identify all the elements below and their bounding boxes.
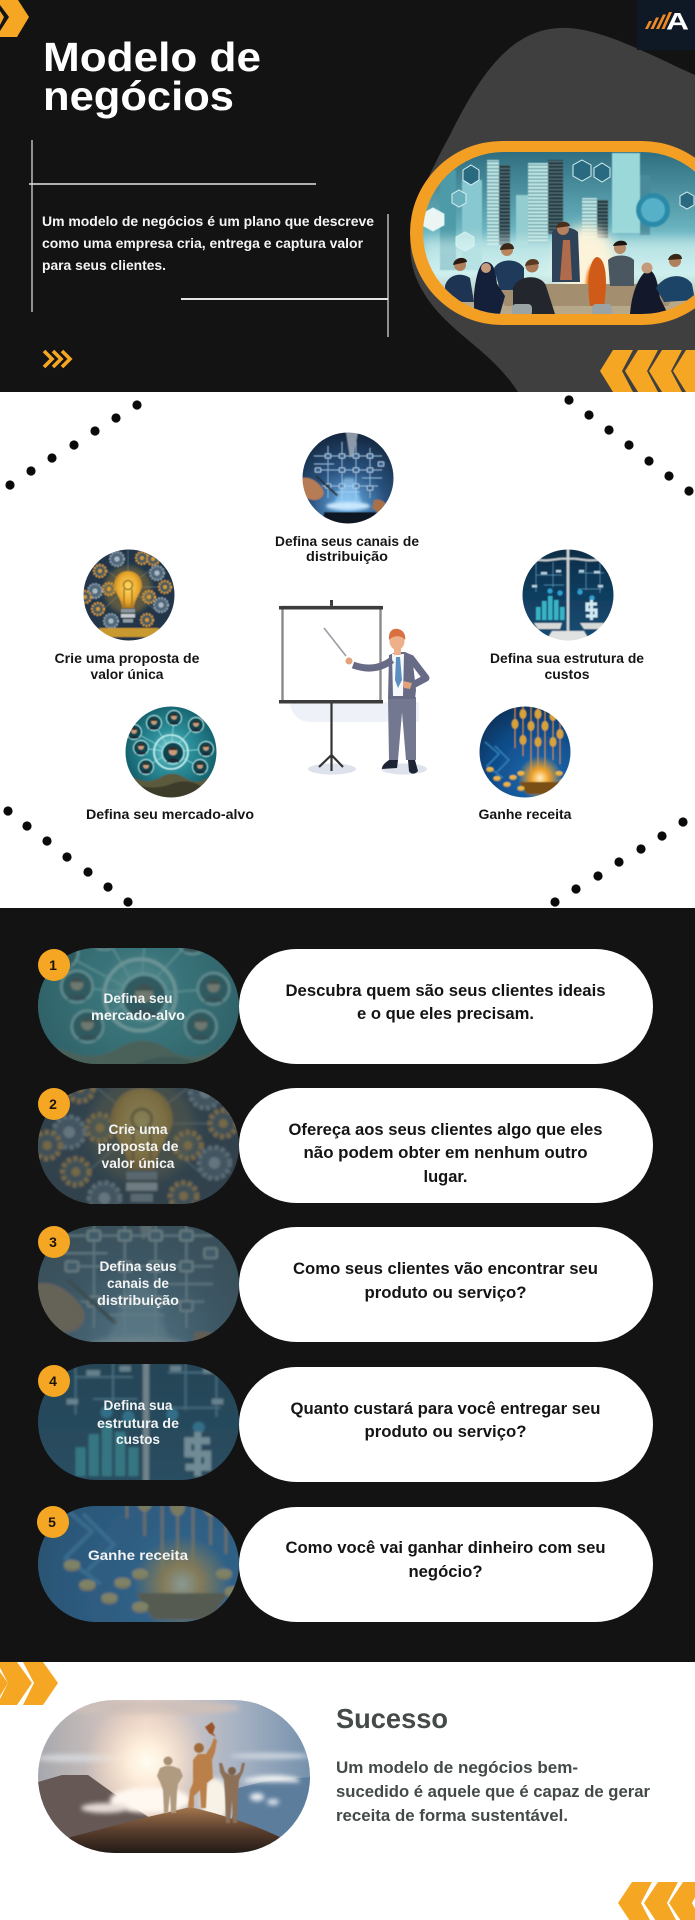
label: value proposition: valor única <box>90 667 164 682</box>
success description <box>336 1759 651 1825</box>
step 4 description: Quanto custará para você entregar seu <box>290 1399 600 1418</box>
panel: success <box>0 1662 695 1920</box>
step 1 description: e o que eles precisam. <box>357 1004 534 1023</box>
step 1 description: Descubra quem são seus clientes ideais <box>286 981 606 1000</box>
step 1 pill label: mercado-alvo <box>91 1008 185 1023</box>
grey blob background <box>410 28 695 392</box>
step 4 description: produto ou serviço? <box>364 1422 526 1441</box>
panel: dark steps section <box>0 858 695 1670</box>
icon: top-left chevron <box>0 0 29 37</box>
step 1 pill label: Defina seu <box>104 991 172 1006</box>
label: value proposition <box>54 651 200 682</box>
intro text: Um modelo de negócios é um plano que descreve <box>42 213 374 229</box>
step 2 description <box>239 1088 653 1203</box>
success description: Um modelo de negócios bem- <box>336 1759 578 1777</box>
step 3 image pill <box>38 1226 239 1342</box>
step 3 number badge: 3 <box>49 1234 57 1250</box>
step 2 pill label: Crie uma <box>108 1122 168 1137</box>
step 5 description: negócio? <box>408 1562 482 1581</box>
label: revenue: Ganhe receita <box>478 807 572 822</box>
step 5 <box>37 1506 653 1622</box>
step 3 pill label: Defina seus <box>100 1259 176 1274</box>
step 4 pill label: custos <box>116 1432 160 1447</box>
step 4 pill label: Defina sua <box>104 1398 173 1413</box>
dotted lines <box>3 395 694 907</box>
step 5 pill label: Ganhe receita <box>88 1548 189 1563</box>
step 1 number badge <box>38 949 70 981</box>
image: revenue <box>480 706 570 798</box>
step 5 description: Como você vai ganhar dinheiro com seu <box>286 1538 606 1557</box>
step 5 number badge: 5 <box>48 1514 56 1530</box>
step 2 pill label <box>98 1122 179 1171</box>
step 2 pill label: valor única <box>102 1156 175 1171</box>
step 4 image pill <box>38 1364 239 1480</box>
step 3 <box>38 1226 653 1342</box>
logo <box>637 0 695 50</box>
step 3 description: Como seus clientes vão encontrar seu <box>293 1259 598 1278</box>
panel: steps diagram on white <box>0 392 695 908</box>
label: value proposition: Crie uma proposta de <box>54 651 200 666</box>
intro text: como uma empresa cria, entrega e captura valor <box>42 235 364 251</box>
step 3 description <box>239 1227 653 1342</box>
logo: A <box>666 8 689 36</box>
step 4 pill label: estrutura de <box>97 1416 180 1431</box>
success description: sucedido é aquele que é capaz de gerar <box>336 1783 651 1801</box>
step 5 image pill <box>38 1506 239 1622</box>
frame lines <box>29 140 388 337</box>
image: target market <box>126 706 216 798</box>
step 2 image pill <box>38 1088 239 1204</box>
image: cost structure <box>522 550 614 640</box>
step 3 pill label: canais de <box>107 1276 169 1291</box>
label: cost structure: custos <box>544 667 590 682</box>
step 1 number badge: 1 <box>49 957 57 973</box>
step 2 number badge <box>38 1088 70 1120</box>
icon: chevrons top-left <box>0 1662 58 1705</box>
icon: chevrons bottom-right <box>618 1882 695 1920</box>
step 3 number badge <box>38 1226 70 1258</box>
step 2 number badge: 2 <box>49 1096 57 1112</box>
step 1 pill label <box>91 991 185 1023</box>
heading: success: Sucesso <box>336 1703 448 1734</box>
icon: chevrons bottom right <box>600 350 695 392</box>
intro text: para seus clientes. <box>42 257 166 273</box>
step 1 description <box>239 949 653 1064</box>
step 2 pill label: proposta de <box>98 1139 179 1154</box>
image: distribution channels <box>302 432 394 524</box>
step 5 number badge <box>37 1506 69 1538</box>
title: Modelo de <box>43 34 261 80</box>
step 3 pill label <box>97 1259 179 1308</box>
illustration: presenter with projection screen <box>279 600 427 774</box>
success description: receita de forma sustentável. <box>336 1807 568 1825</box>
label: distribution channels <box>275 534 419 564</box>
step 2 description: lugar. <box>424 1167 468 1186</box>
step 5 description <box>239 1507 653 1622</box>
step 4 <box>38 1364 653 1482</box>
step 1 image pill <box>38 948 239 1064</box>
title <box>43 34 261 119</box>
photo: team on mountain with trophy <box>35 1700 310 1853</box>
label: distribution channels: Defina seus canais de <box>275 534 419 549</box>
step 4 pill label <box>97 1398 180 1447</box>
label: distribution channels: distribuição <box>306 549 388 564</box>
photo: team meeting in orange pill <box>410 141 695 325</box>
step 3 pill label: distribuição <box>97 1293 179 1308</box>
image: value proposition <box>84 550 174 640</box>
step 4 description <box>239 1367 653 1482</box>
step 2 <box>38 1088 653 1204</box>
step 4 number badge: 4 <box>49 1373 57 1389</box>
label: target market: Defina seu mercado-alvo <box>86 807 254 822</box>
header panel <box>0 0 695 392</box>
label: cost structure <box>490 651 645 682</box>
step 2 description: Ofereça aos seus clientes algo que eles <box>288 1120 602 1139</box>
step 2 description: não podem obter em nenhum outro <box>304 1143 588 1162</box>
title: negócios <box>43 73 234 119</box>
step 4 number badge <box>38 1365 70 1397</box>
step 3 description: produto ou serviço? <box>364 1283 526 1302</box>
label: cost structure: Defina sua estrutura de <box>490 651 645 666</box>
step 1 <box>38 948 653 1064</box>
icon: small triple chevron <box>44 351 70 367</box>
intro text <box>42 213 374 273</box>
